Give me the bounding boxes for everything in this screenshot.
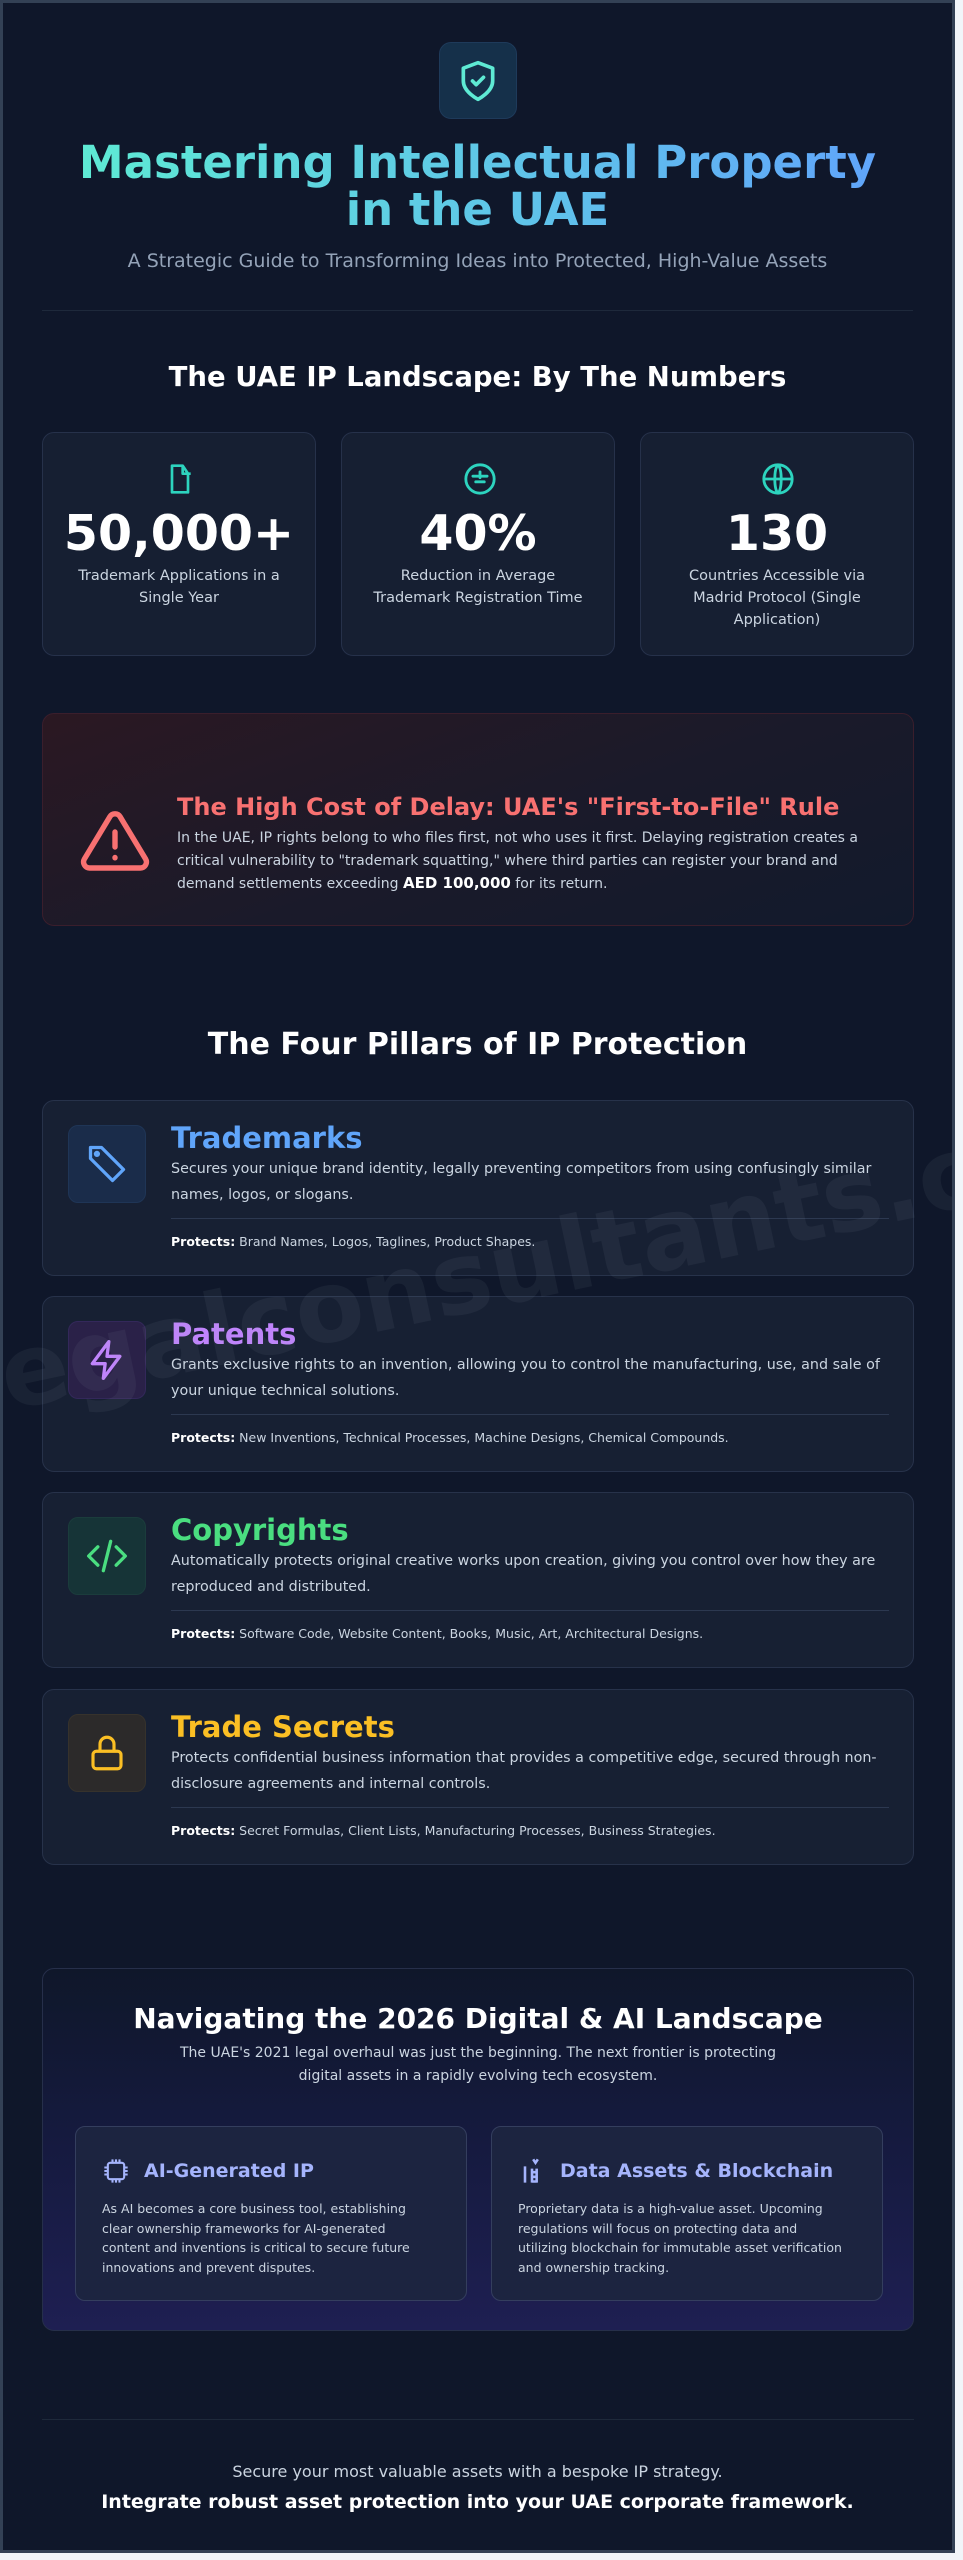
icon: chip: [104, 2159, 128, 2183]
panel: patents: [42, 1296, 914, 1472]
stat card: 130: [640, 432, 914, 656]
icon: shield: [439, 42, 517, 119]
callout: first-to-file warning: [42, 713, 914, 926]
panel: trade secrets: Protects: Secret Formulas, Client Lists, Manufacturing Processes, Business Strategies.: [171, 1823, 716, 1838]
stat card: 130: 130: [726, 505, 828, 562]
panel: trademarks: Trademarks: [171, 1121, 363, 1155]
stat card: 40%: 40%: [419, 505, 537, 562]
icon: globe: [762, 463, 794, 495]
heading: four pillars: The Four Pillars of IP Protection: [208, 1027, 747, 1062]
card: AI-generated IP: As AI becomes a core business tool, establishing clear ownership frameworks for AI-generated content and inventions is critical to secure future innovations and prevent disputes.: [102, 2201, 410, 2274]
icon: timer: [464, 463, 496, 495]
panel: trademarks: Secures your unique brand identity, legally preventing competitors from using confusingly similar names, logos, or slogans.: [171, 1161, 871, 1202]
card: data assets & blockchain: [491, 2126, 883, 2301]
title: Mastering Intellectual Property: [79, 136, 876, 189]
panel: copyrights: Copyrights: [171, 1513, 349, 1547]
stat card: 50,000+: 50,000+: [64, 505, 294, 562]
panel: copyrights: [42, 1492, 914, 1668]
icon: lock: [68, 1714, 146, 1792]
stat card: 40%: Trademark Registration Time: [373, 590, 583, 606]
callout: first-to-file warning: The High Cost of Delay: UAE's "First-to-File" Rule: [177, 793, 839, 821]
subtitle: A Strategic Guide to Transforming Ideas into Protected, High-Value Assets: [128, 250, 827, 272]
panel: digital & AI landscape: [42, 1968, 914, 2331]
stat card: 50,000+: [42, 432, 316, 656]
callout: first-to-file warning: In the UAE, IP rights belong to who files first, not who uses it first. Delaying registration creates a critical vulnerability to "trademark squatting," where third parties can register your brand and demand settlements exceeding AED 100,000 for its return.: [177, 830, 858, 892]
card: data assets & blockchain: Proprietary data is a high-value asset. Upcoming regulations will focus on protecting data and: [518, 2201, 823, 2236]
panel: patents: Protects: New Inventions, Technical Processes, Machine Designs, Chemical Compounds.: [171, 1430, 729, 1445]
heading: by the numbers: The UAE IP Landscape: By The Numbers: [169, 361, 786, 393]
panel: patents: Grants exclusive rights to an invention, allowing you to control the manufacturing, use, and sale of your unique technical solutions.: [171, 1357, 880, 1398]
panel: trademarks: [42, 1100, 914, 1276]
stat card: 130: Countries Accessible via Madrid Protocol (Single Application): [689, 568, 865, 628]
panel: trade secrets: [42, 1689, 914, 1865]
panel: copyrights: Automatically protects original creative works upon creation, giving you control over how they are reproduced and distributed.: [171, 1553, 875, 1594]
icon: code: [68, 1517, 146, 1595]
panel: digital & AI landscape: Navigating the 2026 Digital & AI Landscape: [133, 2002, 823, 2035]
card: AI-generated IP: [75, 2126, 467, 2301]
panel: trade secrets: Protects confidential business information that provides a competitive edge, secured through non-disclosure agreements and internal controls.: [171, 1750, 877, 1792]
stat card: 40%: [341, 432, 615, 656]
panel: trade secrets: Trade Secrets: [171, 1710, 395, 1744]
icon: tag: [68, 1125, 146, 1203]
card: data assets & blockchain: Data Assets & Blockchain: [560, 2160, 833, 2182]
panel: trademarks: Protects: Brand Names, Logos, Taglines, Product Shapes.: [171, 1234, 535, 1249]
footer text: Integrate robust asset protection into your UAE corporate framework.: [101, 2491, 854, 2513]
card: data assets & blockchain: utilizing blockchain for immutable asset verification and ownership tracking.: [518, 2240, 842, 2274]
panel: patents: Patents: [171, 1317, 296, 1351]
footer text: [101, 2462, 854, 2513]
icon: lightning: [68, 1321, 146, 1399]
icon: file: [170, 464, 191, 494]
stat card: 40%: Reduction in Average: [401, 568, 555, 584]
title: [79, 136, 876, 236]
icon: data blocks: [524, 2158, 539, 2183]
title: in the UAE: [346, 183, 609, 236]
panel: copyrights: Protects: Software Code, Website Content, Books, Music, Art, Architectural Designs.: [171, 1626, 703, 1641]
stat card: 50,000+: Trademark Applications in a Single Year: [78, 568, 280, 606]
panel: digital & AI landscape: The UAE's 2021 legal overhaul was just the beginning. The next frontier is protecting digital assets in a rapidly evolving tech ecosystem.: [180, 2045, 776, 2084]
icon: warning triangle: [80, 811, 150, 871]
footer text: Secure your most valuable assets with a bespoke IP strategy.: [232, 2462, 723, 2481]
card: AI-generated IP: AI-Generated IP: [144, 2160, 314, 2182]
